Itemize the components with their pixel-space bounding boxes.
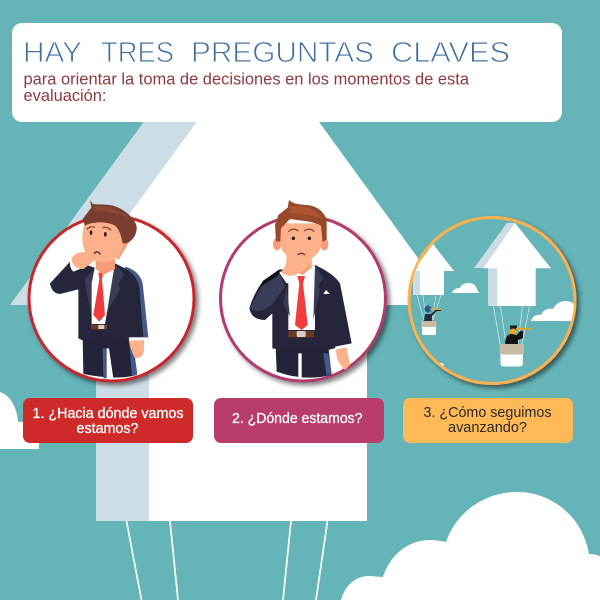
subtitle: evaluación: <box>24 86 106 105</box>
question 3 button: 3. ¿Cómo seguimos <box>424 405 552 421</box>
large balloon <box>474 223 551 366</box>
title: CLAVES <box>391 37 510 69</box>
balloon scene <box>413 223 575 367</box>
header card <box>12 23 562 122</box>
cloud large <box>531 301 575 321</box>
question 1 button: estamos? <box>76 421 138 437</box>
question 1 button: 1. ¿Hacia dónde vamos <box>32 406 184 422</box>
man 1 body <box>50 257 148 378</box>
circle 1: man looking ahead <box>29 200 194 381</box>
large balloon arrow <box>10 38 452 600</box>
man 2 head <box>273 200 328 276</box>
man 1 head <box>72 200 137 275</box>
man 2 body <box>249 265 352 378</box>
circle 3: balloons <box>409 218 575 384</box>
cloud small <box>452 283 479 293</box>
question 3 button <box>403 398 573 443</box>
title: HAY <box>23 37 82 69</box>
subtitle: para orientar la toma de decisiones en los momentos de esta <box>24 70 470 88</box>
small balloon <box>413 244 454 335</box>
subtitle <box>24 70 470 105</box>
question 3 button: avanzando? <box>448 420 527 436</box>
title <box>23 37 510 69</box>
tiny cloud <box>440 363 444 366</box>
bottom right cloud <box>341 492 600 600</box>
title: TRES <box>101 37 174 69</box>
circle 2: man thinking <box>220 200 386 381</box>
question 2 button <box>214 398 384 443</box>
title: PREGUNTAS <box>191 37 374 69</box>
left cloud <box>0 392 39 449</box>
question 2 button: 2. ¿Dónde estamos? <box>232 411 362 427</box>
question 1 button <box>23 398 193 443</box>
